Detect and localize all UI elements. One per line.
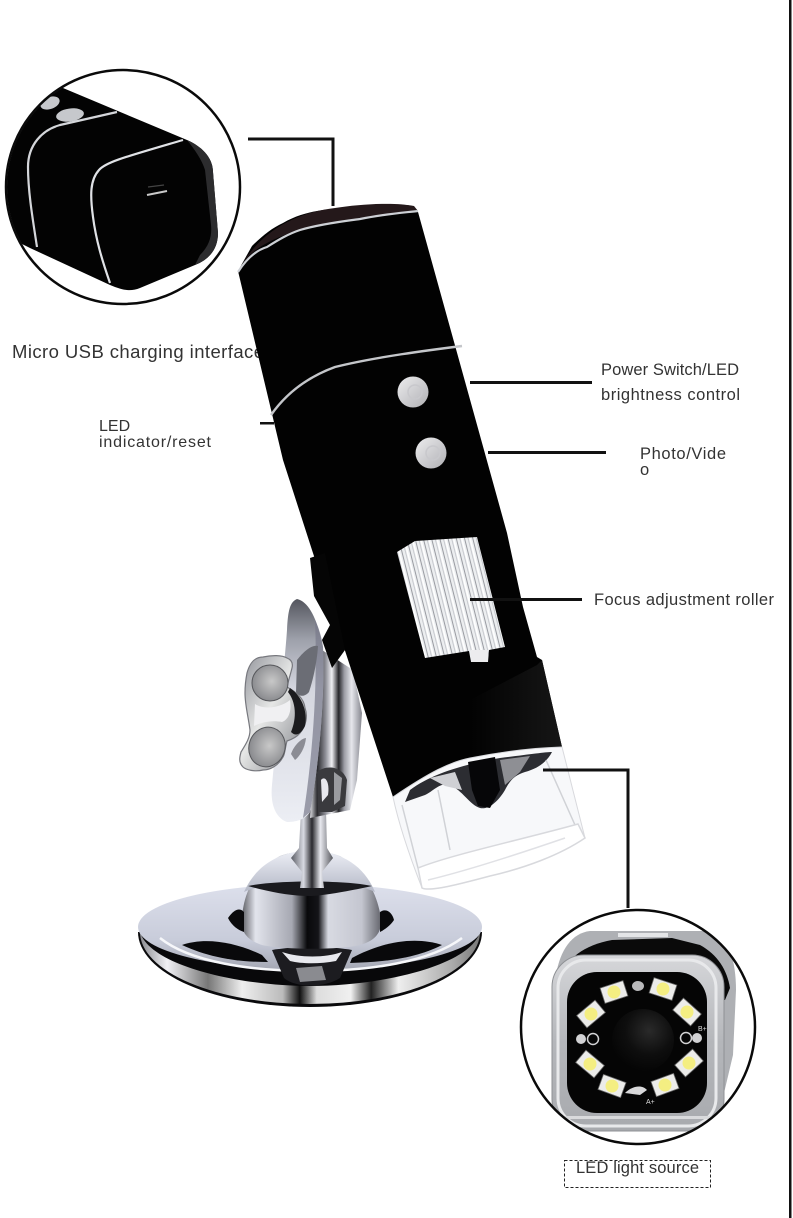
- top cap shading: [240, 204, 418, 268]
- right edge border line: [789, 0, 792, 1218]
- lower body shading: [470, 660, 562, 758]
- solder pads: [632, 981, 644, 991]
- outer rim silhouette, lower half only: [138, 932, 482, 1007]
- silver seam outer: [28, 112, 117, 247]
- label: LED indicator/reset: [99, 418, 212, 451]
- side refractions: [402, 760, 575, 868]
- stand: chrome mounting plate: [272, 599, 323, 822]
- label: LED light source: [564, 1159, 710, 1188]
- LED chips: [576, 978, 703, 1098]
- label: power switch/LED brightness control: Power Switch/LED: [601, 361, 739, 379]
- label: focus adjustment roller: Focus adjustment roller: [594, 591, 774, 609]
- leader line: LED indicator: [260, 422, 274, 424]
- camera lens: [624, 1009, 674, 1056]
- label: photo/video: Photo/Vide: [640, 445, 726, 463]
- label: LED indicator/reset: LED: [99, 418, 130, 435]
- leader line: LED light source: [543, 770, 628, 908]
- inner dark shape: [405, 752, 552, 808]
- white edge of inner disc: [160, 938, 462, 971]
- leader line: photo/video: [488, 451, 606, 454]
- board markings: B+: [698, 1026, 707, 1033]
- grey housing: [557, 931, 736, 1090]
- stand: plate slot: [296, 646, 318, 696]
- leader line: micro USB: [248, 139, 333, 206]
- stand: wing knob: [240, 656, 306, 772]
- black circuit board: [567, 972, 707, 1113]
- focus adjustment roller: [397, 537, 505, 662]
- upper disc surface reaching the silhouette: [138, 884, 482, 970]
- label: LED indicator/reset: indicator/reset: [99, 434, 212, 451]
- stand: plate lower slot: [291, 738, 306, 760]
- pole: [291, 810, 333, 888]
- top silver ring: [238, 211, 418, 272]
- dark under-band crescent: [140, 932, 480, 986]
- callout circle: LED ring close-up: A+: [646, 1099, 655, 1106]
- small buttons: [56, 108, 84, 122]
- label: LED light source: LED light source: [576, 1159, 699, 1177]
- stand: chrome base and pole: [138, 810, 482, 1007]
- label: power switch/LED brightness control: brightness control: [601, 386, 740, 404]
- end face rim shading: [187, 140, 218, 265]
- callout circle: LED ring close-up: [521, 910, 755, 1144]
- hinge: [317, 767, 347, 812]
- button: photo/video: [416, 438, 446, 468]
- button: power switch: [398, 376, 428, 408]
- label: photo/video: [640, 445, 726, 479]
- stand: plate right edge: [303, 620, 323, 818]
- stand clip at body: [310, 553, 345, 668]
- label: Micro USB charging interface: Micro USB charging interface: [12, 341, 264, 362]
- device end black body: [7, 88, 218, 290]
- transparent lens cap: [393, 747, 585, 889]
- middle silver ring: [271, 346, 462, 415]
- dome top highlight: [244, 850, 375, 892]
- leader line: focus roller: [470, 598, 582, 601]
- silver seam on face: [91, 140, 183, 283]
- black band: [558, 938, 730, 1000]
- USB slot: [147, 191, 167, 195]
- clear lens square: [552, 955, 724, 1131]
- microscope body: [238, 204, 562, 797]
- leader line: power switch: [470, 381, 592, 384]
- disc reflections: [182, 941, 268, 962]
- lens rim ellipse: [418, 824, 585, 889]
- chrome rim band: [140, 932, 480, 1004]
- dome: [242, 852, 381, 949]
- label: power switch/LED brightness control: [601, 361, 740, 404]
- callout circle: micro USB port close-up: [0, 60, 240, 304]
- stand: rear bracket: [310, 650, 362, 818]
- label: photo/video: o: [640, 461, 649, 479]
- dome side shadows: [228, 910, 244, 932]
